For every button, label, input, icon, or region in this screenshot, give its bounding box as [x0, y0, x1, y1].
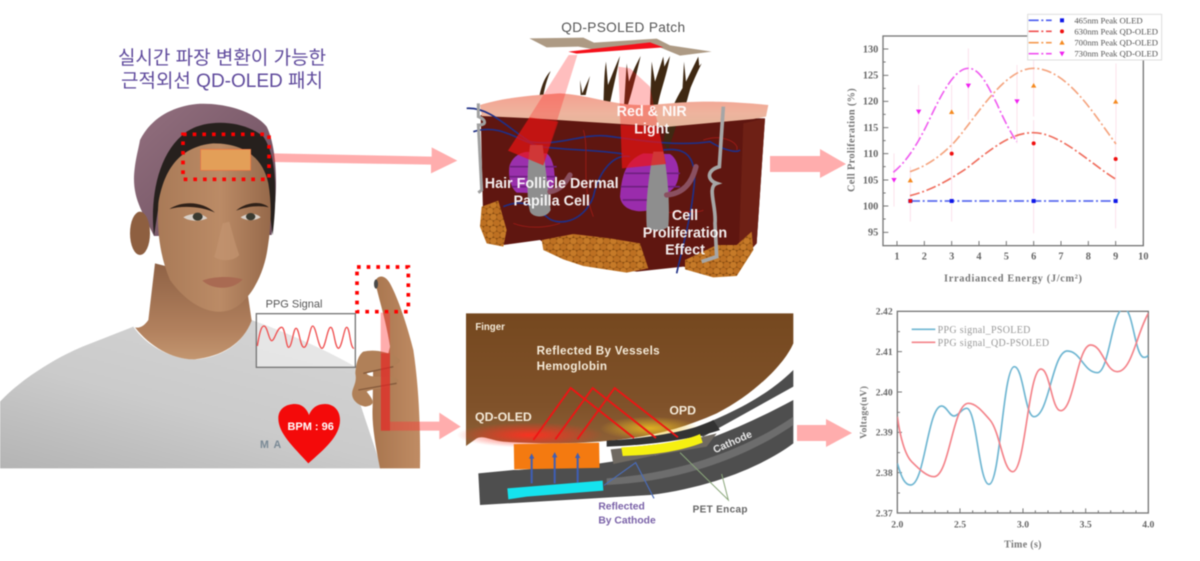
- red and NIR label: Red & NIR: [617, 104, 687, 120]
- blue vessels: [467, 108, 740, 273]
- y axis title: Cell Proliferation (%): [847, 88, 858, 192]
- y tick labels: 115: [863, 123, 878, 134]
- hair back: [134, 104, 276, 236]
- patch label: QD-PSOLED Patch: [561, 20, 685, 35]
- papilla right: [620, 153, 679, 211]
- knuckle lines: [358, 367, 397, 390]
- lighter substrate band: [607, 417, 793, 485]
- legend: PPG signal_QD-PSOLED: [938, 338, 1049, 349]
- eyebrows: [169, 203, 269, 213]
- x tick labels: 9: [1113, 251, 1118, 262]
- arrow: sensor to signal chart: [797, 419, 852, 447]
- finger label: Finger: [475, 322, 505, 333]
- sweat duct right: [702, 107, 723, 262]
- sensor stack: [611, 433, 717, 464]
- dermis right face: [738, 118, 765, 263]
- y tick labels: 2.40: [876, 387, 893, 398]
- title: 실시간 파장 변환이 가능한: [118, 47, 326, 69]
- ticks: [897, 332, 1136, 513]
- heart: [278, 404, 340, 463]
- light beams: [508, 55, 666, 168]
- papilla ribs: [509, 167, 680, 200]
- y tick labels: 110: [863, 149, 878, 160]
- y tick labels: 2.41: [876, 347, 893, 358]
- arrow overlay on hand: [381, 353, 390, 431]
- vessels label: [537, 344, 660, 373]
- follicle label: [485, 176, 619, 209]
- y tick labels: 125: [863, 71, 878, 82]
- x tick labels: 3.5: [1080, 519, 1092, 530]
- effect label: Proliferation: [643, 225, 727, 241]
- patch strip: [529, 38, 712, 56]
- x tick labels: 8: [1086, 251, 1091, 262]
- ticks: [883, 49, 1143, 246]
- vessels label: Hemoglobin: [537, 360, 607, 373]
- hair dark band: [153, 123, 275, 236]
- OPD top cover: [607, 420, 720, 447]
- y tick labels: 130: [863, 44, 878, 55]
- markers magenta: [891, 84, 1020, 183]
- dotted highlight: forehead: [183, 134, 269, 179]
- grey sensor strip back: [683, 370, 793, 437]
- legend: 465nm Peak OLED: [1074, 15, 1143, 25]
- y tick labels: 2.37: [876, 508, 893, 519]
- hairs: [537, 56, 702, 150]
- chart: PPG voltage: [859, 307, 1155, 550]
- y tick labels: [876, 307, 893, 519]
- OPD label: OPD: [669, 404, 696, 418]
- QD glow: [457, 422, 603, 448]
- blue fit line: [910, 198, 1116, 203]
- arrow: patch to skin: [273, 147, 457, 173]
- illustration: person with patch and finger sensor: [0, 104, 461, 468]
- x tick labels: [894, 251, 1148, 262]
- thin red capillaries: [513, 130, 737, 227]
- effect label: [643, 208, 727, 259]
- follicle label: Papilla Cell: [513, 193, 590, 209]
- dermis: [481, 115, 765, 277]
- papilla left: [509, 152, 555, 193]
- dotted highlight: fingertip: [357, 267, 408, 312]
- QD-OLED label: QD-OLED: [475, 410, 532, 424]
- finger: [466, 313, 793, 446]
- x tick labels: 6: [1031, 251, 1036, 262]
- x tick labels: 3: [949, 251, 954, 262]
- title: 근적외선 QD-OLED 패치: [121, 70, 323, 92]
- blue leader lines: [604, 463, 654, 498]
- neck: [135, 263, 252, 359]
- curve: QD-PSOLED: [897, 313, 1148, 477]
- legend: [912, 325, 1049, 349]
- x axis title: Irradianced Energy (J/cm²): [944, 274, 1083, 285]
- error bars: [894, 48, 1116, 233]
- orange fit curve: [910, 68, 1116, 172]
- y tick labels: [863, 44, 878, 239]
- follicle shafts: [527, 145, 669, 230]
- red reflected rays: [533, 388, 678, 440]
- PET label: PET Encap: [693, 505, 748, 516]
- cathode label: Cathode: [712, 429, 754, 456]
- x tick labels: 3.0: [1017, 519, 1029, 530]
- y tick labels: 105: [863, 175, 878, 186]
- chart: cell proliferation: [847, 14, 1162, 285]
- x axis title: Time (s): [1004, 539, 1042, 550]
- eyes: [183, 214, 261, 221]
- y tick labels: 2.38: [876, 468, 893, 479]
- plot frame: [883, 36, 1143, 246]
- face: [158, 143, 271, 312]
- y tick labels: 120: [863, 97, 878, 108]
- markers red: [908, 141, 1118, 203]
- x tick labels: 1: [894, 251, 900, 262]
- effect label: Cell: [672, 208, 698, 224]
- gland tubes: [550, 167, 696, 195]
- shirt logo: MA: [260, 439, 286, 451]
- y tick labels: 2.42: [876, 307, 893, 318]
- legend: 730nm Peak QD-OLED: [1074, 49, 1158, 59]
- forehead patch: [201, 149, 251, 170]
- yellow OPD layer: [621, 434, 703, 456]
- arrow: skin to chart: [770, 149, 846, 178]
- x tick labels: 4.0: [1142, 519, 1155, 530]
- y tick labels: 100: [863, 201, 878, 212]
- sweat duct left: [478, 103, 485, 193]
- red and NIR label: Light: [634, 122, 669, 138]
- green leader lines: [680, 453, 728, 500]
- ear: [130, 212, 150, 255]
- x tick labels: [891, 519, 1155, 530]
- illustration: skin cross-section: [467, 20, 768, 277]
- markers blue: [908, 199, 1118, 203]
- x tick labels: 2.5: [954, 519, 966, 530]
- patch light strip: [568, 42, 663, 54]
- arrow: finger to device: [381, 313, 461, 439]
- curled fingers: [352, 351, 400, 407]
- fat cells: [480, 201, 753, 277]
- BPM value: BPM : 96: [287, 421, 334, 433]
- curve: PSOLED: [897, 308, 1148, 485]
- PPG signal label: PPG Signal: [266, 299, 322, 311]
- reflected by cathode label: [598, 501, 656, 526]
- grey substrate: [478, 400, 793, 505]
- vessels label: Reflected By Vessels: [537, 344, 660, 357]
- legend: PPG signal_PSOLED: [938, 325, 1031, 336]
- x tick labels: 2.0: [891, 519, 904, 530]
- follicle label: Hair Follicle Dermal: [485, 176, 619, 192]
- effect label: Effect: [665, 243, 705, 259]
- hand: [372, 276, 420, 468]
- t-shirt: [0, 320, 382, 468]
- OPD glow: [600, 417, 700, 440]
- fingertip nail: [374, 279, 378, 289]
- light beams in dermis: [508, 117, 666, 168]
- x tick labels: 10: [1138, 251, 1148, 262]
- PPG signal box: [256, 314, 355, 367]
- lips: [202, 277, 243, 288]
- y axis title: Voltage(uV): [859, 386, 870, 439]
- pupils: [193, 213, 255, 221]
- magenta fit curve: [893, 68, 1017, 172]
- y tick labels: 2.39: [876, 428, 893, 439]
- blue upward arrows: [529, 452, 580, 483]
- legend: 700nm Peak QD-OLED: [1074, 38, 1158, 48]
- y tick labels: 95: [868, 228, 878, 239]
- title: [118, 47, 326, 92]
- reflected by cathode label: Reflected: [598, 501, 645, 512]
- red fit curve: [910, 133, 1116, 196]
- markers orange: [908, 83, 1118, 182]
- x tick labels: 4: [976, 251, 982, 262]
- legend: 630nm Peak QD-OLED: [1074, 26, 1158, 36]
- cyan OLED layer: [507, 481, 603, 499]
- reflected by cathode label: By Cathode: [598, 515, 656, 526]
- x tick labels: 5: [1004, 251, 1009, 262]
- orange QD layer: [514, 443, 600, 469]
- illustration: finger on sensor: [457, 313, 793, 526]
- legend: [1028, 14, 1162, 60]
- x tick labels: 2: [922, 251, 927, 262]
- red and NIR label: [617, 104, 687, 138]
- nose: [214, 222, 239, 260]
- epidermis: [480, 93, 768, 127]
- x tick labels: 7: [1058, 251, 1064, 262]
- plot frame: [897, 311, 1148, 513]
